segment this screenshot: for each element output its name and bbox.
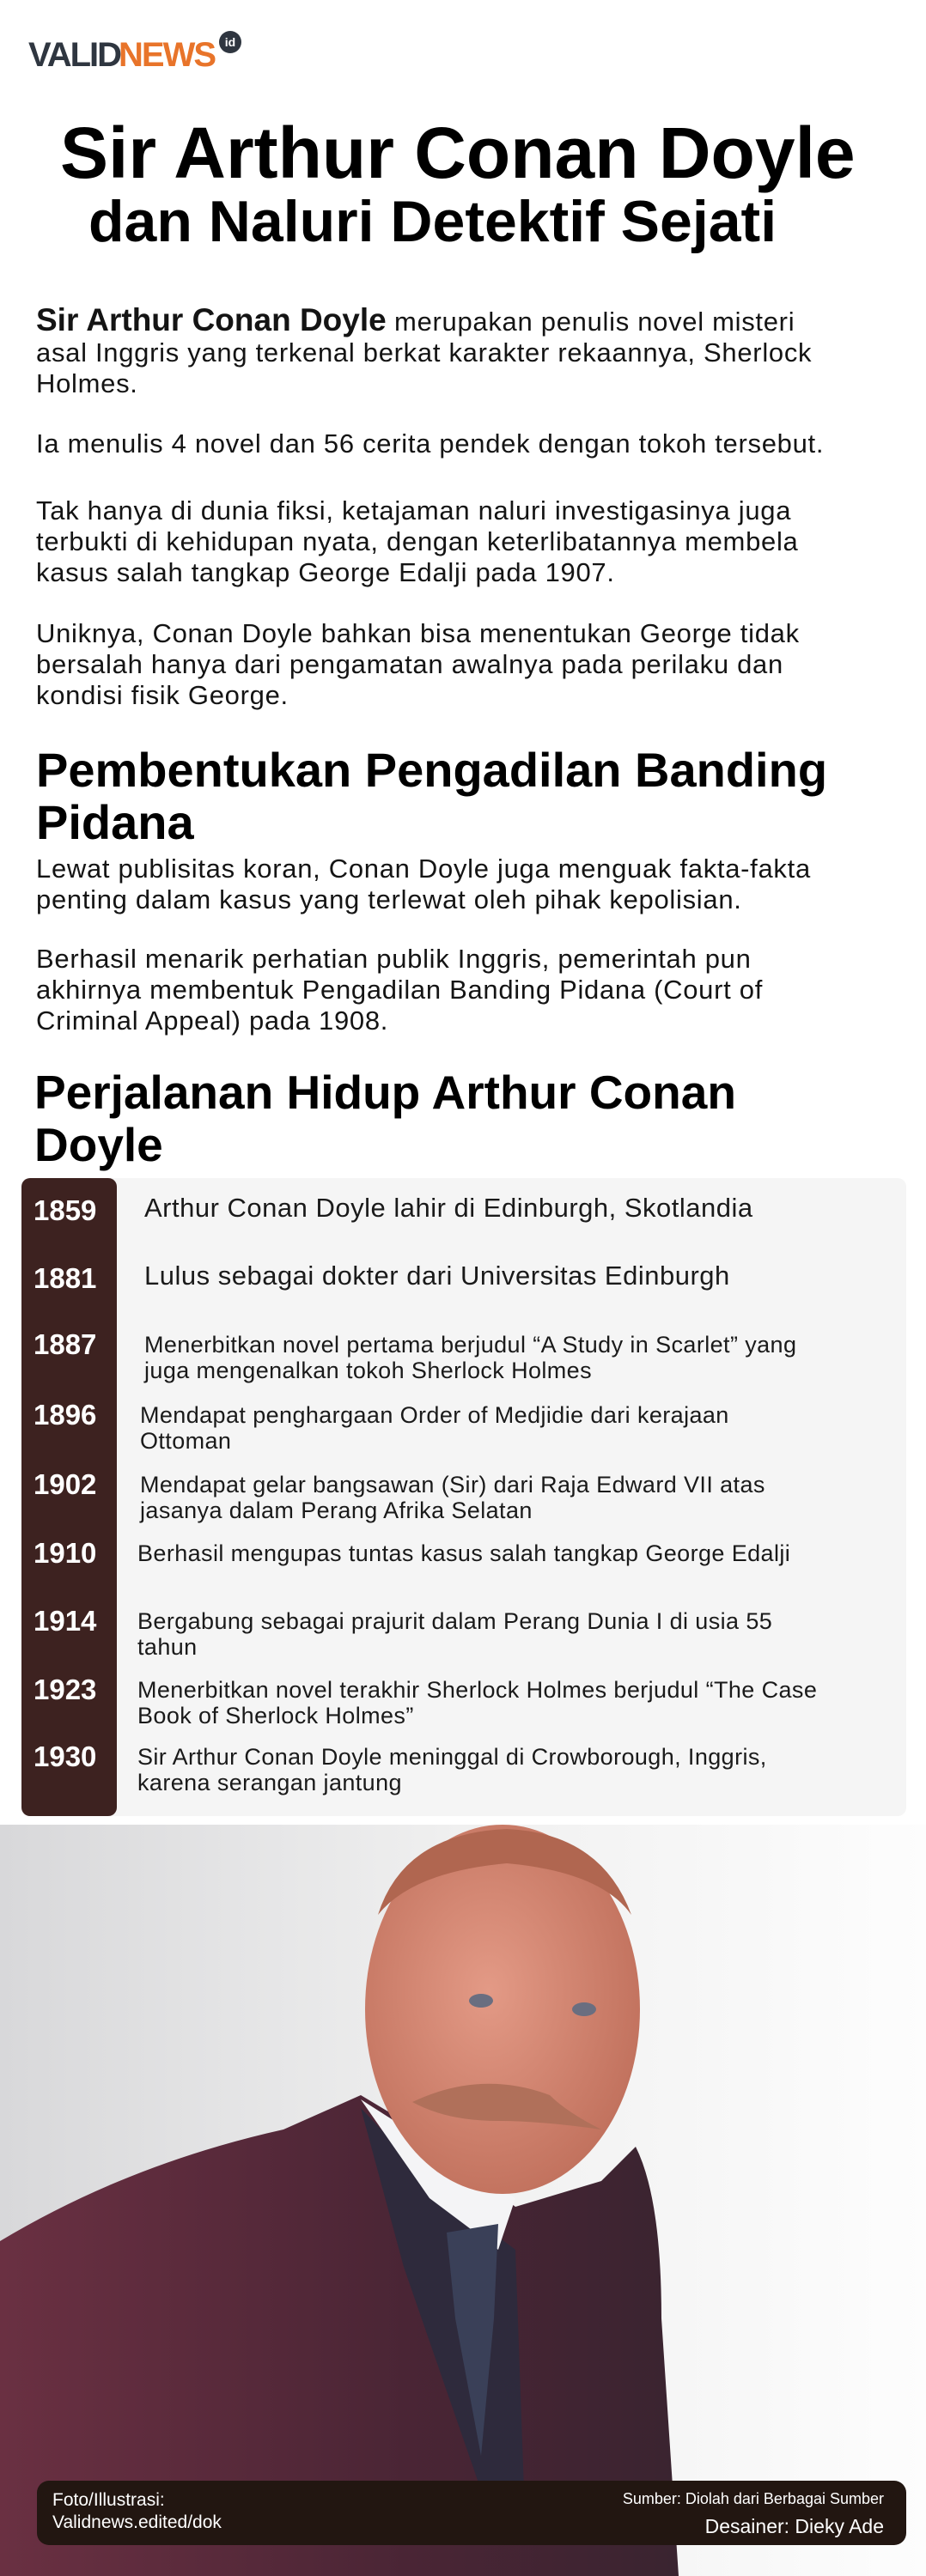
timeline entries	[34, 1193, 817, 1795]
intro text: asal Inggris yang terkenal berkat karakter rekaannya, Sherlock	[36, 337, 812, 368]
heading: pengadilan banding: Pidana	[36, 795, 194, 849]
designer: Desainer: Dieky Ade	[705, 2515, 884, 2537]
title: Sir Arthur Conan Doyle	[60, 112, 856, 193]
text: pengadilan	[36, 854, 811, 1036]
year column	[21, 1178, 117, 1816]
logo	[28, 31, 241, 74]
timeline entries: 1881	[34, 1262, 96, 1294]
logo: VALID	[28, 36, 120, 74]
timeline entries: Lulus sebagai dokter dari Universitas Edinburgh	[144, 1261, 730, 1291]
heading: pengadilan banding: Pembentukan Pengadilan Banding	[36, 743, 827, 797]
timeline entries: Book of Sherlock Holmes”	[137, 1703, 414, 1728]
timeline entries: Bergabung sebagai prajurit dalam Perang Dunia I di usia 55	[137, 1608, 772, 1634]
timeline entries: 1859	[34, 1194, 96, 1226]
timeline entries: Berhasil mengupas tuntas kasus salah tangkap George Edalji	[137, 1540, 790, 1566]
title	[60, 112, 856, 254]
intro text: Holmes.	[36, 368, 138, 398]
timeline panel	[21, 1178, 906, 1816]
footer credits bar	[37, 2481, 906, 2545]
timeline entries: jasanya dalam Perang Afrika Selatan	[140, 1498, 533, 1523]
timeline entries: 1923	[34, 1674, 96, 1705]
text: pengadilan: Berhasil menarik perhatian publik Inggris, pemerintah pun	[36, 944, 752, 974]
timeline entries: tahun	[137, 1634, 198, 1660]
text: pengadilan: Criminal Appeal) pada 1908.	[36, 1005, 388, 1036]
intro text: Uniknya, Conan Doyle bahkan bisa menentukan George tidak	[36, 618, 800, 648]
heading: pengadilan banding	[36, 743, 827, 849]
timeline entries: Mendapat penghargaan Order of Medjidie dari kerajaan	[140, 1402, 729, 1428]
timeline entries: 1930	[34, 1741, 96, 1772]
intro text: bersalah hanya dari pengamatan awalnya pada perilaku dan	[36, 649, 783, 679]
intro text	[36, 302, 824, 710]
intro text: kondisi fisik George.	[36, 680, 289, 710]
photo credit	[52, 2490, 222, 2532]
heading: perjalanan hidup: Perjalanan Hidup Arthur Conan	[34, 1066, 736, 1119]
intro text: Sir Arthur Conan Doyle merupakan penulis novel misteri	[36, 302, 795, 337]
portrait photo	[0, 1825, 711, 2576]
intro text: kasus salah tangkap George Edalji pada 1907.	[36, 557, 615, 587]
logo: id	[225, 35, 235, 49]
text: pengadilan: penting dalam kasus yang terlewat oleh pihak kepolisian.	[36, 884, 742, 914]
timeline entries: Mendapat gelar bangsawan (Sir) dari Raja Edward VII atas	[140, 1472, 765, 1498]
text: pengadilan: Lewat publisitas koran, Conan Doyle juga menguak fakta-fakta	[36, 854, 811, 884]
title: dan Naluri Detektif Sejati	[88, 189, 777, 254]
intro text: Ia menulis 4 novel dan 56 cerita pendek dengan tokoh tersebut.	[36, 428, 824, 459]
timeline entries: juga mengenalkan tokoh Sherlock Holmes	[144, 1358, 592, 1383]
logo: NEWS	[119, 36, 215, 74]
heading: perjalanan hidup	[34, 1066, 736, 1171]
intro text: terbukti di kehidupan nyata, dengan keterlibatannya membela	[36, 526, 798, 556]
timeline entries: karena serangan jantung	[137, 1770, 402, 1795]
timeline entries: 1914	[34, 1605, 96, 1637]
intro text: Tak hanya di dunia fiksi, ketajaman naluri investigasinya juga	[36, 495, 791, 526]
timeline entries: Menerbitkan novel terakhir Sherlock Holmes berjudul “The Case	[137, 1677, 817, 1703]
heading: perjalanan hidup: Doyle	[34, 1118, 163, 1171]
timeline entries: Ottoman	[140, 1428, 231, 1454]
text: pengadilan: akhirnya membentuk Pengadilan Banding Pidana (Court of	[36, 975, 763, 1005]
timeline entries: Arthur Conan Doyle lahir di Edinburgh, Skotlandia	[144, 1193, 753, 1223]
source: Sumber: Diolah dari Berbagai Sumber	[623, 2490, 884, 2507]
timeline entries: 1896	[34, 1399, 96, 1431]
timeline entries: Sir Arthur Conan Doyle meninggal di Crowborough, Inggris,	[137, 1744, 767, 1770]
timeline entries: 1910	[34, 1537, 96, 1569]
timeline entries: Menerbitkan novel pertama berjudul “A Study in Scarlet” yang	[144, 1332, 796, 1358]
timeline entries: 1902	[34, 1468, 96, 1500]
photo credit: Validnews.edited/dok	[52, 2512, 222, 2532]
timeline entries: 1887	[34, 1328, 96, 1360]
photo credit: Foto/Illustrasi:	[52, 2490, 165, 2510]
